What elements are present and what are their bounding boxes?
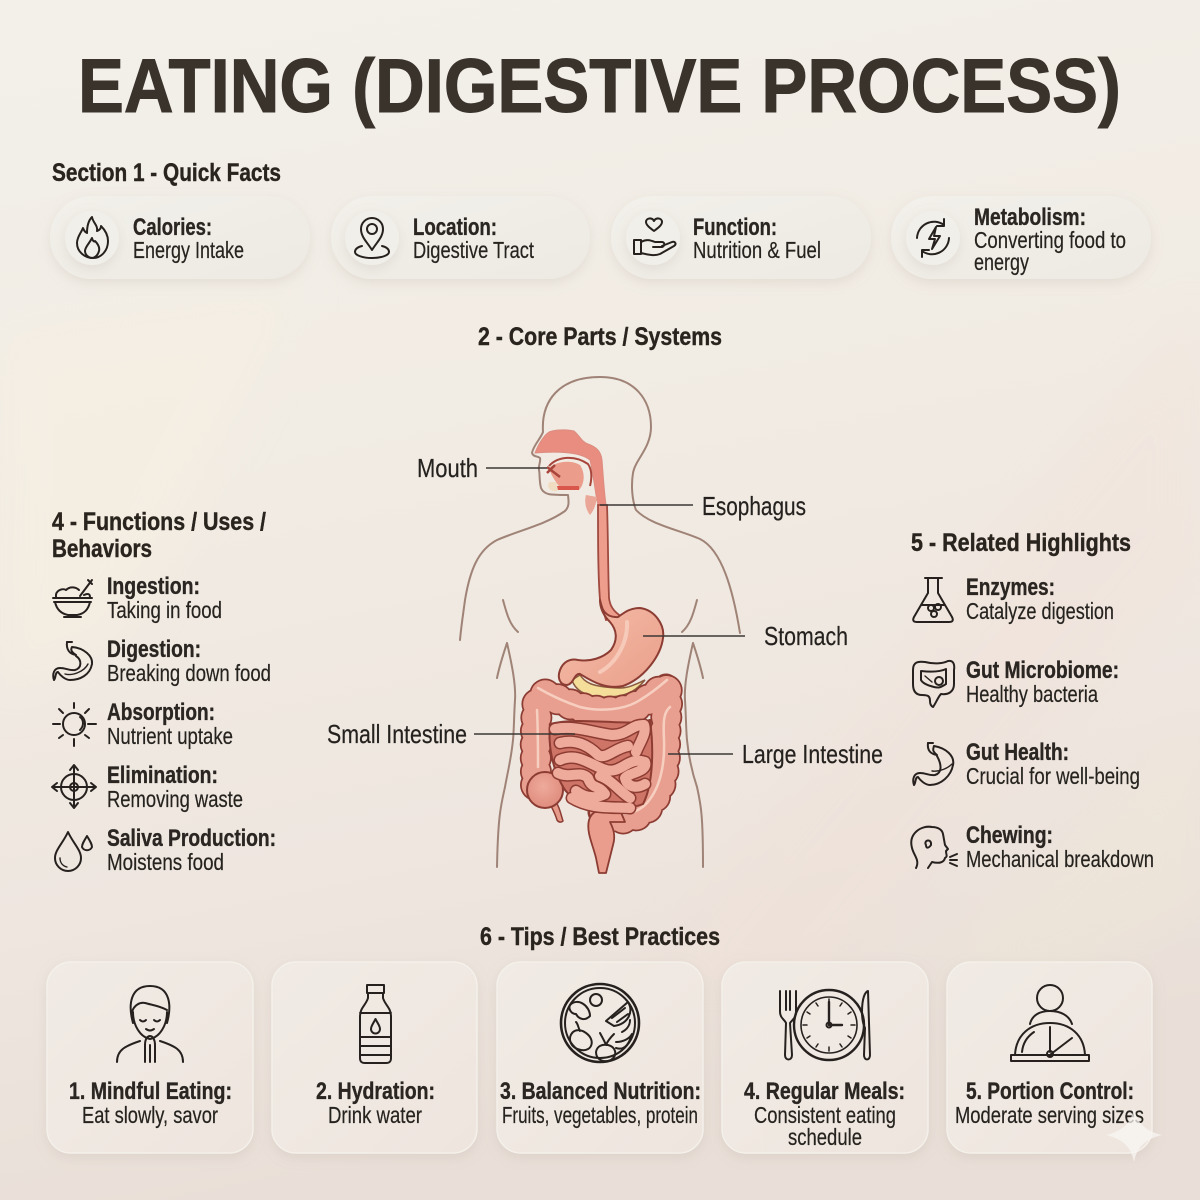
item: saliva: Saliva Production: (107, 825, 276, 852)
card: location (331, 196, 590, 279)
card: calories: Energy Intake (133, 237, 244, 263)
card: metabolism: Metabolism: (974, 204, 1086, 231)
heading: tips: 6 - Tips / Best Practices (480, 923, 720, 951)
icon: flame (77, 217, 108, 258)
heading: core parts: 2 - Core Parts / Systems (478, 323, 722, 351)
label: large intestine: Large Intestine (742, 739, 883, 769)
icon: bottle (360, 985, 391, 1063)
card: portion control: Moderate serving sizes (955, 1102, 1144, 1128)
item: enzymes: Catalyze digestion (966, 598, 1114, 624)
icon: map pin (355, 218, 389, 258)
card: metabolism (891, 196, 1151, 279)
item: chewing: Mechanical breakdown (966, 846, 1154, 872)
card: portion control: 5. Portion Control: (966, 1078, 1134, 1105)
item: absorption: Absorption: (107, 699, 215, 726)
title: EATING (DIGESTIVE PROCESS) (78, 44, 1121, 129)
item: chewing: Chewing: (966, 822, 1053, 849)
icon: drops (55, 832, 92, 871)
panel: related highlights (911, 529, 1154, 872)
item: elimination (52, 762, 243, 812)
label: esophagus: Esophagus (702, 491, 806, 521)
cecum and appendix (527, 772, 563, 822)
card: balanced nutrition (497, 962, 703, 1153)
icon: portion dome (1011, 985, 1089, 1061)
card: function (611, 196, 871, 279)
label: stomach: Stomach (764, 621, 848, 651)
item: saliva (55, 825, 276, 875)
panel: tips (47, 923, 1152, 1153)
stomach (559, 600, 663, 687)
large intestine (536, 680, 670, 818)
icon: sun (53, 703, 96, 746)
icon: person (117, 986, 183, 1062)
card: balanced nutrition: 3. Balanced Nutrition: (500, 1078, 701, 1105)
card: location: Digestive Tract (413, 237, 534, 263)
icon: stomach with food (913, 743, 953, 785)
item: digestion: Breaking down food (107, 660, 271, 686)
body outline (460, 377, 740, 867)
card: portion control (947, 962, 1152, 1153)
card: mindful eating (47, 962, 253, 1153)
item: enzymes: Enzymes: (966, 574, 1055, 601)
label: small intestine: Small Intestine (327, 719, 467, 749)
panel: quick facts (50, 159, 1151, 279)
icon: hand and heart (634, 218, 675, 255)
item: digestion (53, 636, 271, 686)
icon: flask (913, 578, 953, 622)
item: gut health: Gut Health: (966, 739, 1069, 766)
rectum (588, 810, 625, 873)
item: gut microbiome (913, 657, 1119, 707)
heading: functions: 4 - Functions / Uses / (52, 508, 266, 536)
icon: chewing head (911, 827, 957, 868)
icon: arrows target (52, 765, 96, 808)
label: mouth: Mouth (417, 453, 478, 483)
item: gut microbiome: Healthy bacteria (966, 681, 1098, 707)
heading: section 1: Section 1 - Quick Facts (52, 159, 281, 187)
card: function: Function: (693, 214, 777, 241)
card: hydration (272, 962, 477, 1153)
mouth and throat (535, 430, 606, 515)
card: regular meals: 4. Regular Meals: (744, 1078, 905, 1105)
card: regular meals: Consistent eating (754, 1102, 896, 1128)
item: ingestion: Taking in food (107, 597, 222, 623)
card: function: Nutrition & Fuel (693, 237, 821, 263)
card: metabolism: Converting food to (974, 227, 1126, 253)
card: location: Location: (413, 214, 497, 241)
leader lines (474, 468, 745, 754)
item: chewing (911, 822, 1154, 872)
diagram: digestive system (327, 377, 883, 873)
card: regular meals (722, 962, 928, 1153)
item: elimination: Elimination: (107, 762, 218, 789)
icon: intestine (913, 661, 954, 707)
card: hydration: 2. Hydration: (316, 1078, 435, 1105)
item: ingestion (53, 573, 222, 623)
icon: clock plate (780, 990, 870, 1060)
esophagus (598, 505, 622, 620)
small intestine (550, 720, 652, 809)
item: gut health (913, 739, 1140, 789)
item: digestion: Digestion: (107, 636, 201, 663)
card: hydration: Drink water (328, 1102, 422, 1128)
item: absorption (53, 699, 233, 749)
pancreas (572, 675, 645, 697)
card: metabolism: energy (974, 249, 1029, 275)
panel: functions: Behaviors (52, 535, 152, 563)
panel: functions (52, 508, 276, 875)
item: absorption: Nutrient uptake (107, 723, 233, 749)
item: enzymes (913, 574, 1114, 624)
card: calories (50, 196, 310, 279)
icon: bowl (53, 580, 92, 617)
icon: cycle and bolt (917, 219, 949, 257)
card: mindful eating: 1. Mindful Eating: (69, 1078, 232, 1105)
item: gut health: Crucial for well-being (966, 763, 1140, 789)
heading: related highlights: 5 - Related Highlights (911, 529, 1131, 557)
item: ingestion: Ingestion: (107, 573, 200, 600)
card: regular meals: schedule (788, 1124, 862, 1150)
card: mindful eating: Eat slowly, savor (82, 1102, 218, 1128)
item: gut microbiome: Gut Microbiome: (966, 657, 1119, 684)
item: elimination: Removing waste (107, 786, 243, 812)
item: saliva: Moistens food (107, 849, 224, 875)
icon: plate of food (561, 984, 639, 1062)
icon: stomach (53, 642, 92, 680)
icon: sparkle watermark (1106, 1108, 1162, 1162)
card: calories: Calories: (133, 214, 212, 241)
card: balanced nutrition: Fruits, vegetables, protein (502, 1102, 698, 1128)
